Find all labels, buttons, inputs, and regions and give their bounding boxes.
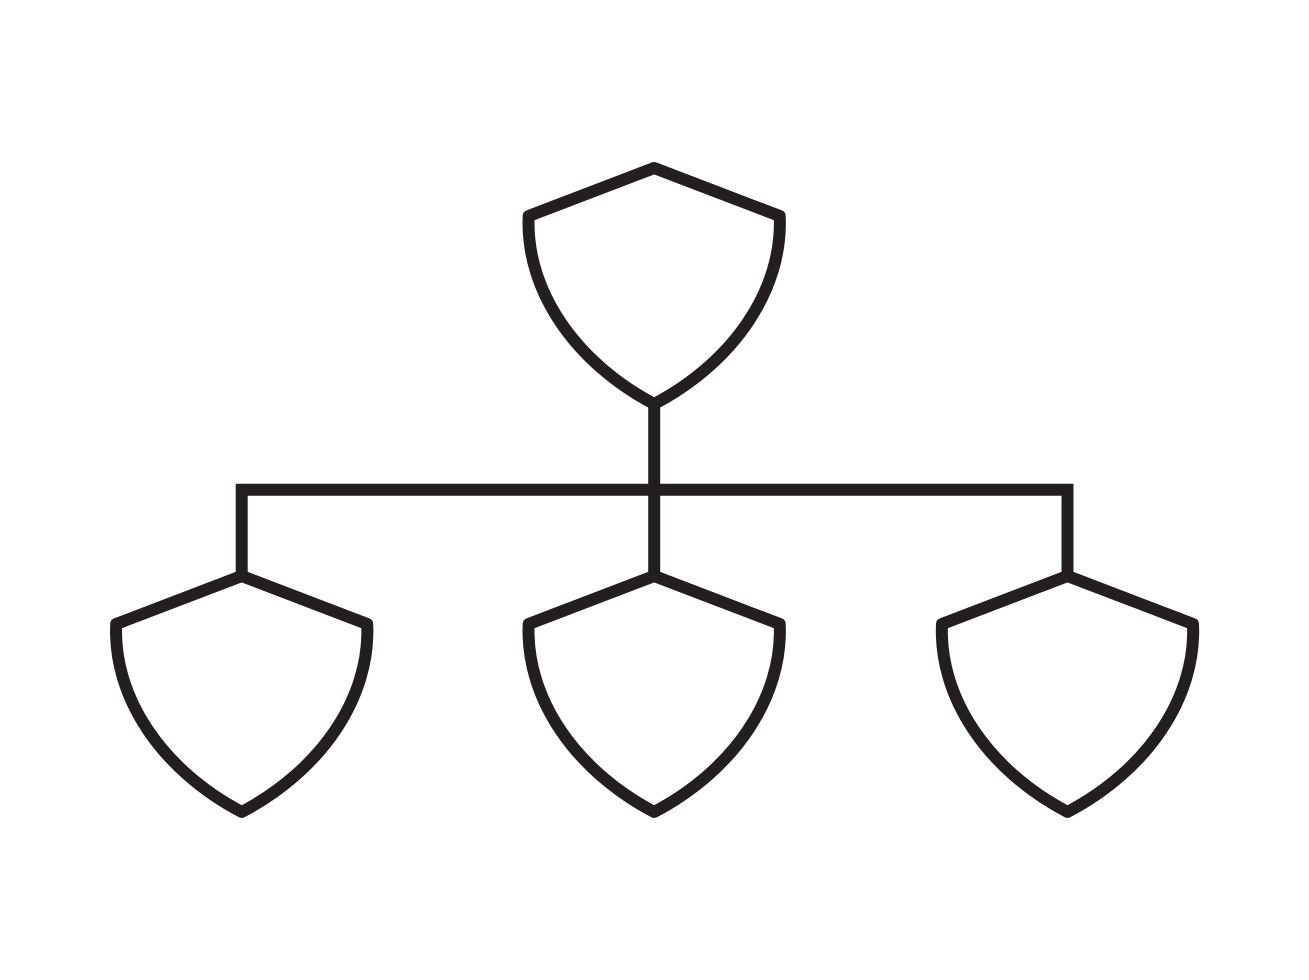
shield: top — [529, 168, 780, 404]
shield: bottom left — [116, 576, 367, 812]
connector lines — [242, 400, 1067, 578]
shield: bottom right — [942, 576, 1193, 812]
shield: bottom center — [529, 576, 780, 812]
